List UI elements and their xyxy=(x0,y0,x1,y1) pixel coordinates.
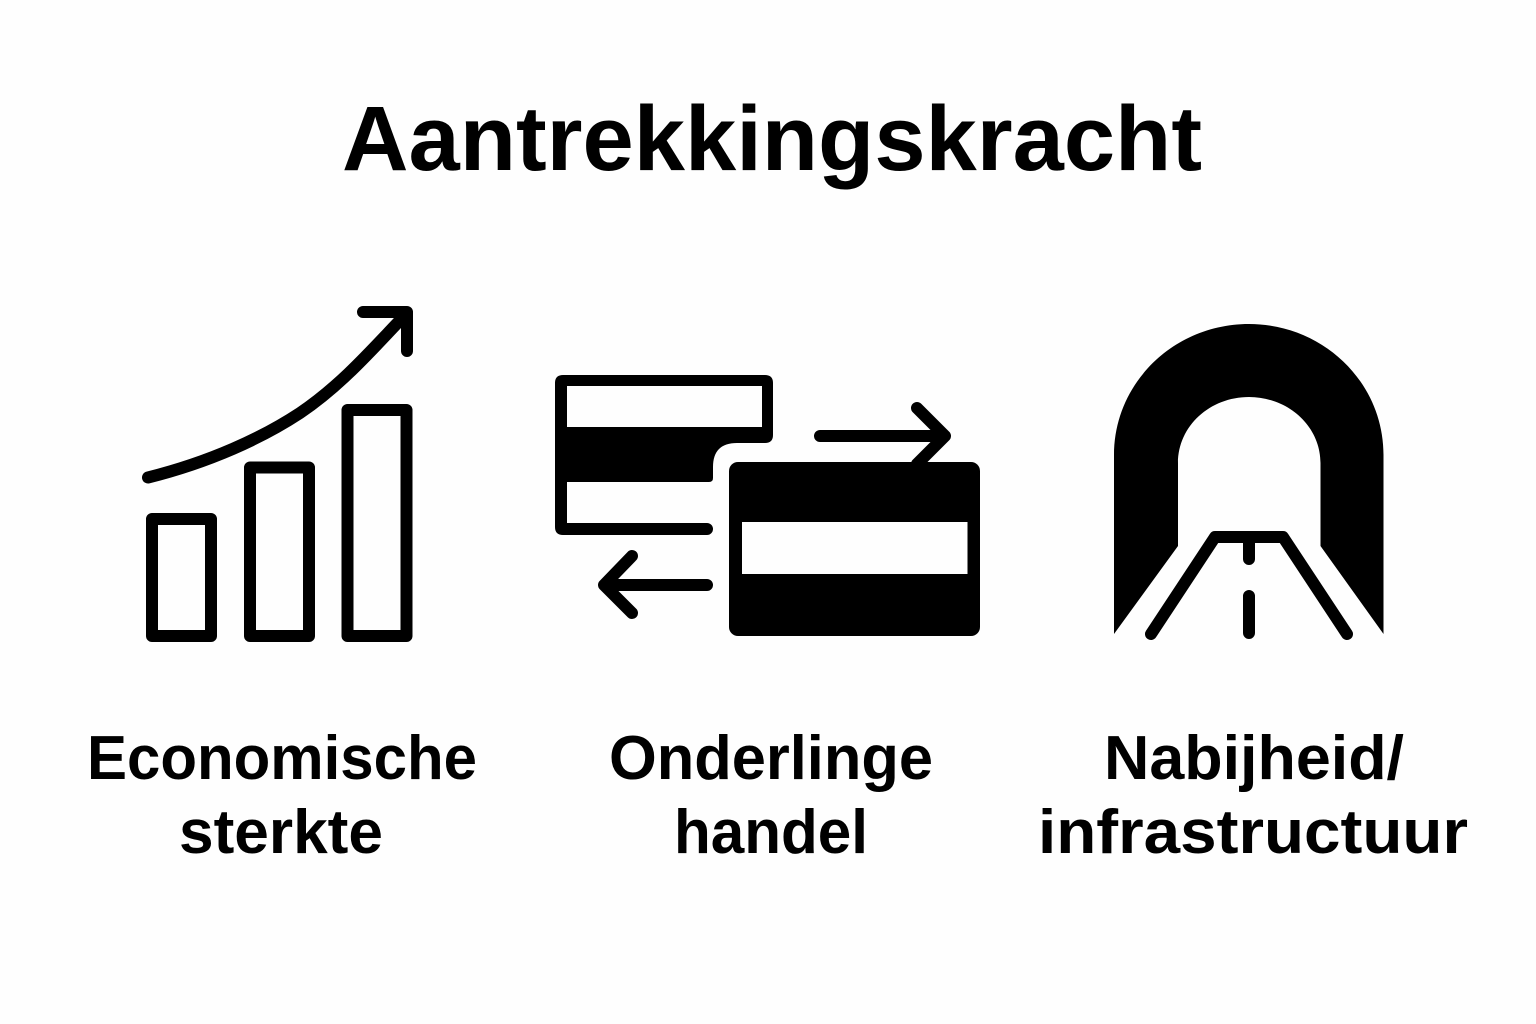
label: economic strength: sterkte xyxy=(179,798,383,867)
label: economic strength: Economische xyxy=(87,724,477,793)
label: mutual trade: handel xyxy=(674,798,868,867)
label: proximity and infrastructure xyxy=(1038,724,1468,867)
label: economic strength xyxy=(87,724,477,867)
title: Aantrekkingskracht xyxy=(342,88,1202,190)
icon: tunnel with road xyxy=(1114,324,1384,634)
icon: growing bar chart with arrow xyxy=(148,312,407,636)
label: proximity and infrastructure: infrastructuur xyxy=(1038,798,1468,867)
label: proximity and infrastructure: Nabijheid/ xyxy=(1104,724,1404,793)
label: mutual trade: Onderlinge xyxy=(609,724,933,793)
label: mutual trade xyxy=(609,724,933,867)
icon: trade exchange between two cards xyxy=(555,375,980,636)
